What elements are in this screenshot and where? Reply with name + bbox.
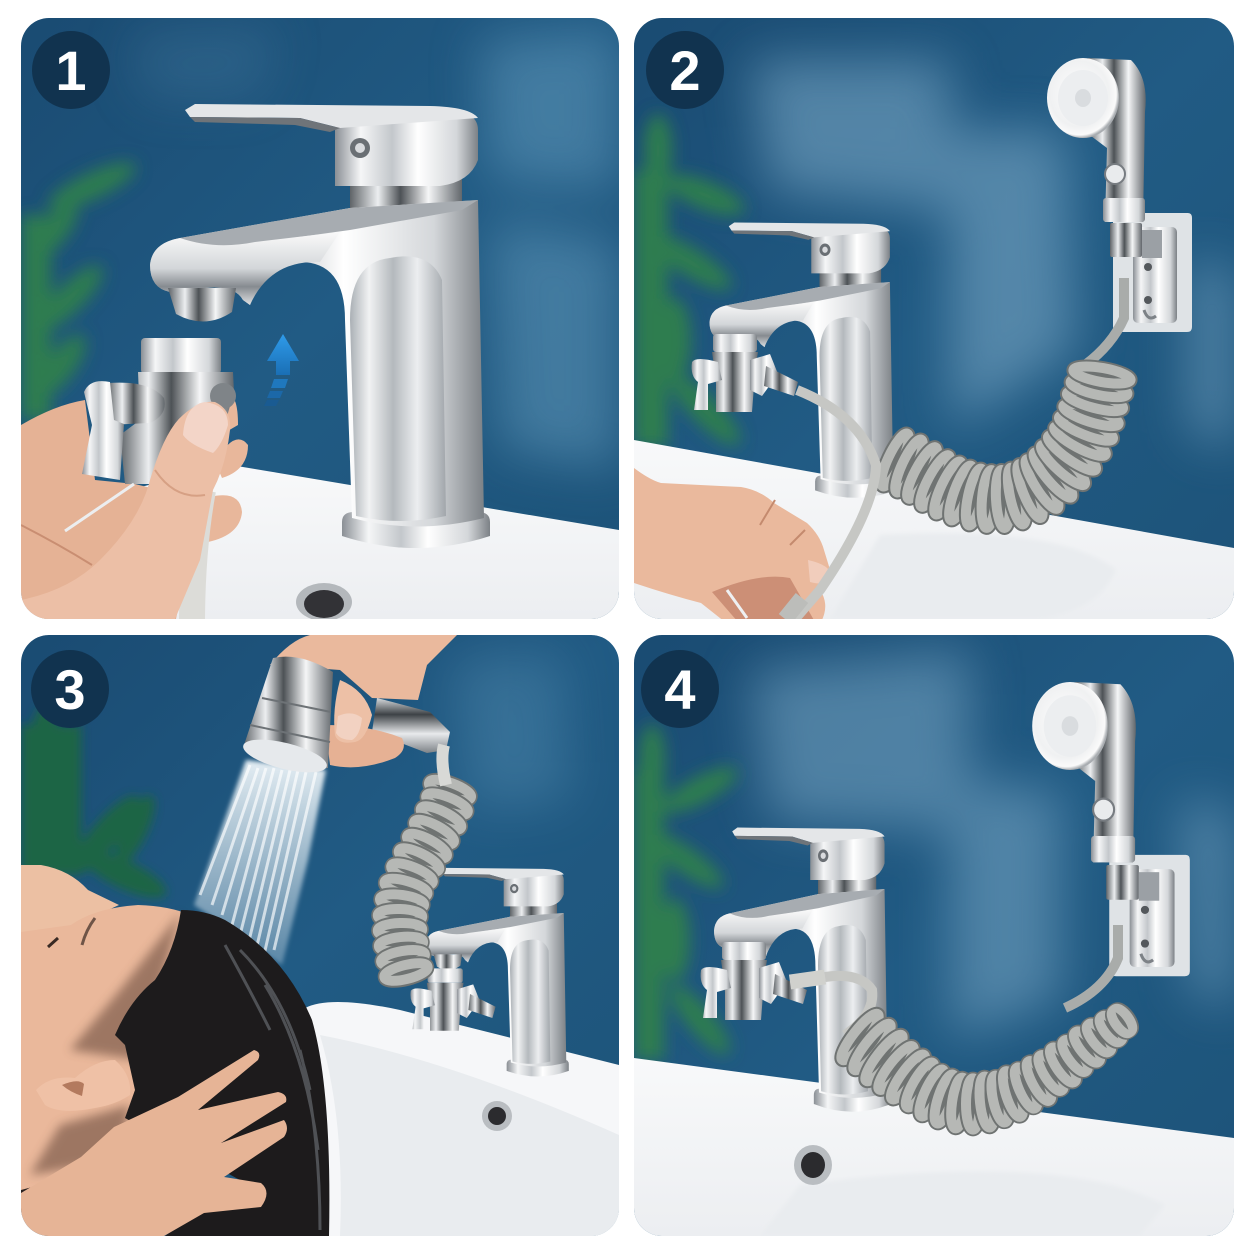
hair [115,910,329,1236]
faucet [426,868,569,1077]
sink basin [320,1035,619,1236]
wet hair highlights [225,945,320,1230]
shower head [1032,682,1136,862]
lower fingers [325,725,404,767]
plant [14,154,141,420]
step badge 3: 3 [54,658,86,721]
step badge 4 [641,650,719,728]
drain [296,583,352,621]
wall background [21,18,619,619]
plant [634,724,743,1062]
palm [21,400,177,619]
water spray [194,760,326,965]
woman arm [21,865,119,933]
hand in hair [21,1050,287,1236]
wall background [634,18,1234,619]
faucet [714,828,891,1112]
diverter valve [82,338,236,484]
sink [634,440,1234,619]
finger gap and folds [21,470,205,565]
thin upper hose [1065,925,1118,1008]
sink basin [760,1171,1165,1236]
upper hose [442,745,446,785]
diverter [692,334,798,412]
plant [21,705,172,907]
hand [634,468,831,622]
faucet [710,222,896,498]
thumb [334,680,372,743]
wall light patches [130,25,619,470]
arrow up [264,334,299,406]
wall background [634,635,1234,1236]
step badge 3 [31,650,109,728]
back fingers [208,395,248,542]
sink [305,1002,619,1236]
thumb [21,402,230,619]
wall background [21,635,619,1236]
wall light patches [750,60,1234,450]
thin upper hose [1085,278,1124,365]
coiled hose [876,363,1132,528]
shower head [1047,58,1146,222]
drain [794,1145,832,1185]
sink basin [880,536,1039,544]
step badge 2: 2 [669,39,701,102]
thin hose [785,390,876,619]
panel 3: wash hair [21,635,619,1236]
hand holding head [270,635,457,700]
coiled hose [837,1004,1137,1130]
wall holder [1106,855,1190,976]
step badge 2 [646,31,724,109]
white hose [192,490,203,625]
dark shadow behind head [21,925,110,1210]
plant [634,114,749,454]
coiled hose [377,775,474,984]
wall light patches [750,650,1234,1040]
panel 2: connect the hose [634,18,1234,622]
wall holder [1110,213,1192,332]
soft hairline [30,912,181,1175]
wall light patches [450,650,570,810]
diverter [701,942,807,1020]
woman face [21,905,190,1190]
sprayer handle [372,698,450,753]
closed eye and brow [48,918,95,947]
drain [482,1101,512,1131]
thin hose [790,976,872,1035]
faucet [150,104,490,548]
step badge 1: 1 [55,39,87,102]
diverter [410,968,496,1031]
sink [21,464,619,619]
step badge 4: 4 [664,658,696,721]
shower head [240,657,333,779]
step badge 1 [32,31,110,109]
panel 1: attach diverter to the faucet [14,18,619,625]
panel 4: hang shower [634,635,1234,1236]
ear [36,1060,130,1111]
thumbnail [183,402,228,453]
sink [634,1058,1234,1236]
